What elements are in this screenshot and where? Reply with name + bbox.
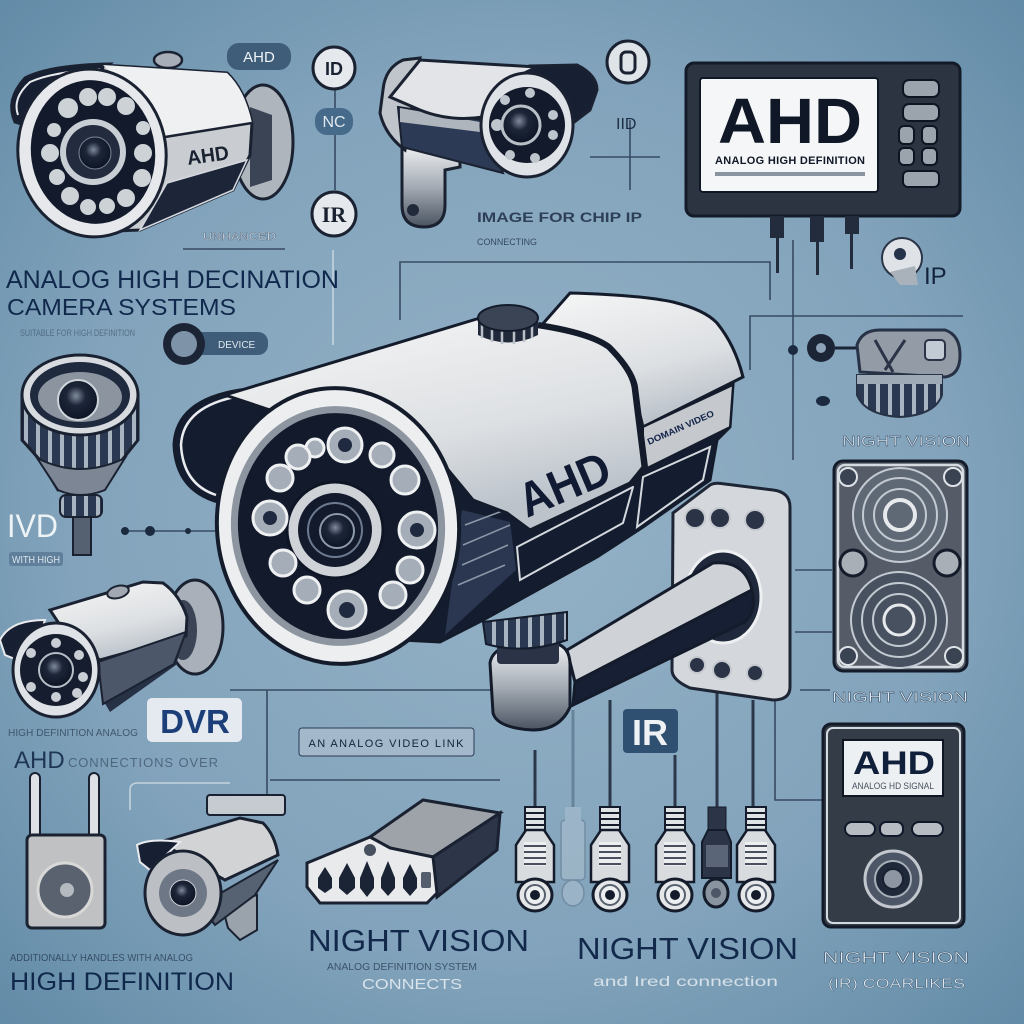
small labels top: CONNECTING	[477, 237, 537, 247]
label: AHD connections	[14, 747, 218, 774]
caption under top camera: IMAGE FOR CHIP IP	[477, 209, 642, 225]
router icon	[27, 773, 105, 928]
right: speaker panel	[834, 461, 967, 671]
label: night vision upper right: NIGHT VISION	[842, 433, 970, 450]
badge: ID	[313, 47, 355, 89]
label: IID: IID	[616, 116, 636, 133]
badge: IR	[312, 192, 356, 236]
connector lines	[122, 90, 963, 810]
badge: ID: ID	[325, 59, 343, 79]
monitor title: AHD	[718, 85, 862, 157]
label: AHD on camera: AHD	[186, 142, 230, 170]
label: night vision mid right: NIGHT VISION	[832, 689, 968, 706]
badge: AHD	[227, 43, 291, 70]
lens	[287, 482, 383, 578]
heading: night vision centre: NIGHT VISION	[308, 923, 529, 958]
screen title: AHD	[853, 745, 935, 781]
caption: ADDITIONALLY HANDLES WITH ANALOG	[10, 953, 193, 964]
caption: connections: CONNECTS	[362, 976, 462, 993]
monitor buttons	[899, 80, 939, 187]
top-right monitor	[686, 63, 960, 275]
front ring	[205, 378, 471, 674]
top-right monitor: ANALOG HIGH DEFINITION	[715, 155, 865, 167]
plug 1	[516, 807, 554, 911]
infrared LEDs	[253, 428, 435, 629]
wall plate	[672, 483, 790, 700]
plug 3	[591, 807, 629, 911]
top-center camera	[380, 58, 597, 227]
right: device with AHD screen: ANALOG HD SIGNAL	[852, 781, 934, 791]
monitor cables	[770, 216, 859, 275]
connector plugs	[516, 807, 775, 911]
badge: IR	[623, 709, 678, 753]
front shell	[225, 318, 643, 530]
badge: DVR	[147, 698, 242, 742]
caption: (IR) COARLIKES	[828, 975, 965, 991]
label: IP with small icon: IP	[924, 263, 947, 290]
plug 2	[561, 807, 585, 906]
rear grey panel with strip text	[643, 385, 733, 470]
lower body	[400, 385, 733, 642]
DVR box	[307, 800, 500, 903]
label: IVD: IVD	[7, 508, 58, 544]
pill icon with label: DEVICE	[218, 340, 256, 351]
label: AHD: AHD	[511, 442, 619, 528]
badge: analog connection: AN ANALOG VIDEO LINK	[308, 738, 464, 750]
badge: analog connection	[299, 728, 474, 756]
label: AHD connections: CONNECTIONS OVER	[68, 755, 218, 770]
LED cores	[263, 438, 424, 618]
top knob	[478, 305, 538, 344]
bottom-left camera	[137, 795, 285, 940]
main title	[6, 266, 339, 338]
heading: night vision right: NIGHT VISION	[577, 931, 798, 966]
mount arm	[483, 551, 761, 730]
bottom-left heading: HIGH DEFINITION	[10, 968, 234, 996]
main title: ANALOG HIGH DECINATION	[6, 266, 339, 294]
heading: night vision bottom right: NIGHT VISION	[823, 950, 969, 967]
pill icon with label	[163, 323, 268, 365]
right: device with AHD screen	[823, 724, 964, 927]
dome camera left	[22, 355, 138, 555]
main title: CAMERA SYSTEMS	[7, 294, 236, 320]
badge: AHD: AHD	[243, 49, 275, 66]
caption: ANALOG DEFINITION SYSTEM	[327, 962, 477, 973]
visor underside	[174, 385, 310, 502]
main title: SUITABLE FOR HIGH DEFINITION	[20, 328, 135, 338]
plug 6	[737, 807, 775, 911]
badge: IR: IR	[322, 202, 347, 227]
top-left camera	[7, 52, 293, 246]
caption: and Ired connection	[593, 973, 778, 989]
badge: lock icon	[607, 41, 649, 83]
badge: NC: NC	[322, 114, 346, 131]
caption under top-left camera: UNHANCED	[203, 231, 276, 243]
label: AHD connections: AHD	[14, 747, 65, 774]
rear grey panel with strip text: DOMAIN VIDEO	[646, 408, 716, 447]
plug 4	[656, 807, 694, 911]
connector dots	[121, 345, 830, 536]
badge: DVR: DVR	[160, 703, 230, 740]
right: dome device	[807, 330, 960, 417]
rear shell	[540, 293, 743, 427]
caption: IVD: WITH HIGH	[12, 555, 60, 566]
label: IP with small icon	[882, 238, 947, 290]
small labels top	[203, 41, 649, 247]
main camera	[174, 293, 790, 730]
badge: IR: IR	[632, 712, 668, 753]
badge: NC	[315, 108, 353, 135]
left bullet camera	[0, 580, 223, 717]
caption: high definition: HIGH DEFINITION ANALOG	[8, 728, 138, 739]
plug 5	[702, 807, 731, 907]
